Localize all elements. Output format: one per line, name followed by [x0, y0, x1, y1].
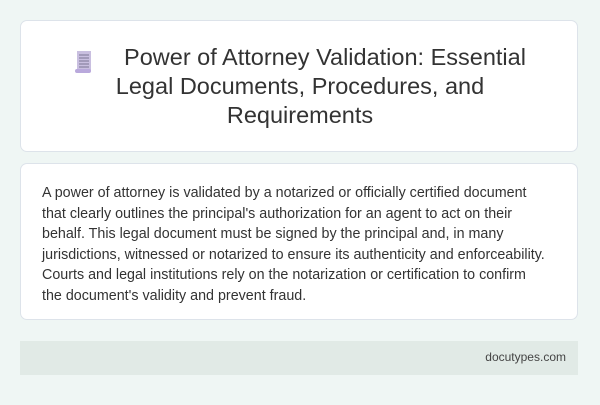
panel: description	[20, 163, 578, 320]
text block: that clearly outlines the principal's authorization for an agent to act on their	[42, 206, 512, 222]
title: Power of Attorney Validation: Essential	[124, 44, 526, 70]
footer text: docutypes.com	[485, 350, 566, 364]
text block: behalf. This legal document must be signed by the principal and, in many	[42, 226, 503, 242]
title: Legal Documents, Procedures, and	[116, 73, 484, 99]
footer	[20, 341, 578, 375]
title: Requirements	[227, 102, 373, 128]
text block	[42, 185, 545, 304]
text block: Courts and legal institutions rely on the notarization or certification to confirm	[42, 267, 526, 283]
panel: title card	[20, 20, 578, 152]
text block: jurisdictions, witnessed or notarized to ensure its authenticity and enforceability.	[42, 246, 545, 262]
text block: A power of attorney is validated by a notarized or officially certified document	[42, 185, 527, 201]
text block: the document's validity and prevent fraud.	[42, 288, 306, 304]
icon: document	[75, 51, 91, 73]
title	[116, 44, 526, 128]
